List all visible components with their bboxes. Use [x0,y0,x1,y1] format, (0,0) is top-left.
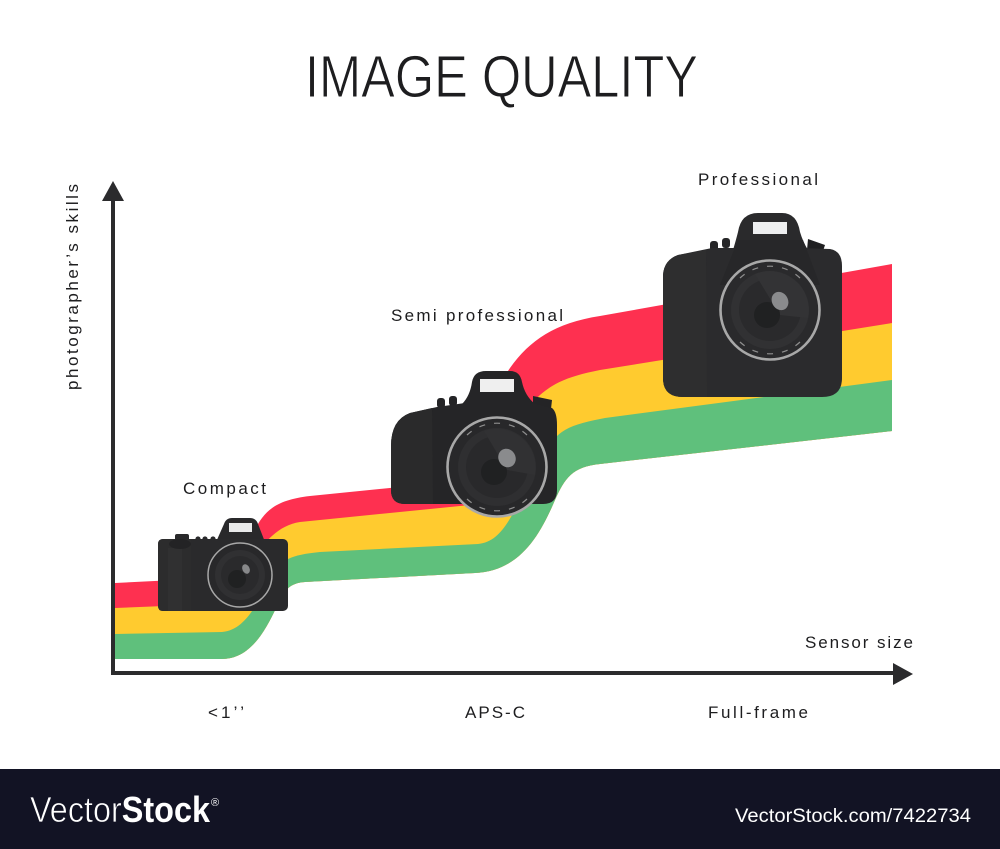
prism [462,371,535,404]
flash [753,222,787,234]
dials [437,396,457,408]
prism [733,213,808,250]
prism shadow [720,240,820,285]
camera: semi professional [391,371,557,516]
label: Semi professional: Semi professional [391,306,563,325]
label: Compact: Compact [183,479,266,498]
grip [391,408,433,504]
footer logo: VectorStock [30,789,211,830]
body [663,248,842,397]
camera: compact [158,518,288,611]
footer url: VectorStock.com/7422734 [735,805,971,827]
tick label: under 1 inch: <1’’ [208,703,244,722]
band: green [115,380,892,659]
grip [663,250,707,397]
registered mark: ® [211,797,219,809]
ribbon chart: quality bands [115,264,892,659]
lens [720,260,820,360]
footer banner [0,769,1000,849]
knobs [195,536,216,542]
x axis label: Sensor size [805,633,913,652]
body [158,539,288,611]
flash [480,379,514,392]
band: yellow [115,323,892,659]
label: Professional: Professional [698,170,818,189]
lens [208,543,272,607]
prism [216,518,265,542]
right button [533,396,552,409]
lens [448,418,546,516]
body [391,403,557,504]
dial [175,534,189,541]
axes [102,181,913,685]
grip [158,539,191,611]
camera: professional [663,213,842,397]
dials [710,238,730,251]
flash [229,523,252,532]
tick label: Full-frame: Full-frame [708,703,808,722]
x axis arrow [111,663,913,685]
band: red [115,264,892,659]
title: IMAGE QUALITY [305,44,698,110]
y axis arrow [102,181,124,675]
y axis label: photographer’s skills [63,184,82,390]
right button [807,239,825,251]
tick label: APS-C: APS-C [465,703,525,722]
